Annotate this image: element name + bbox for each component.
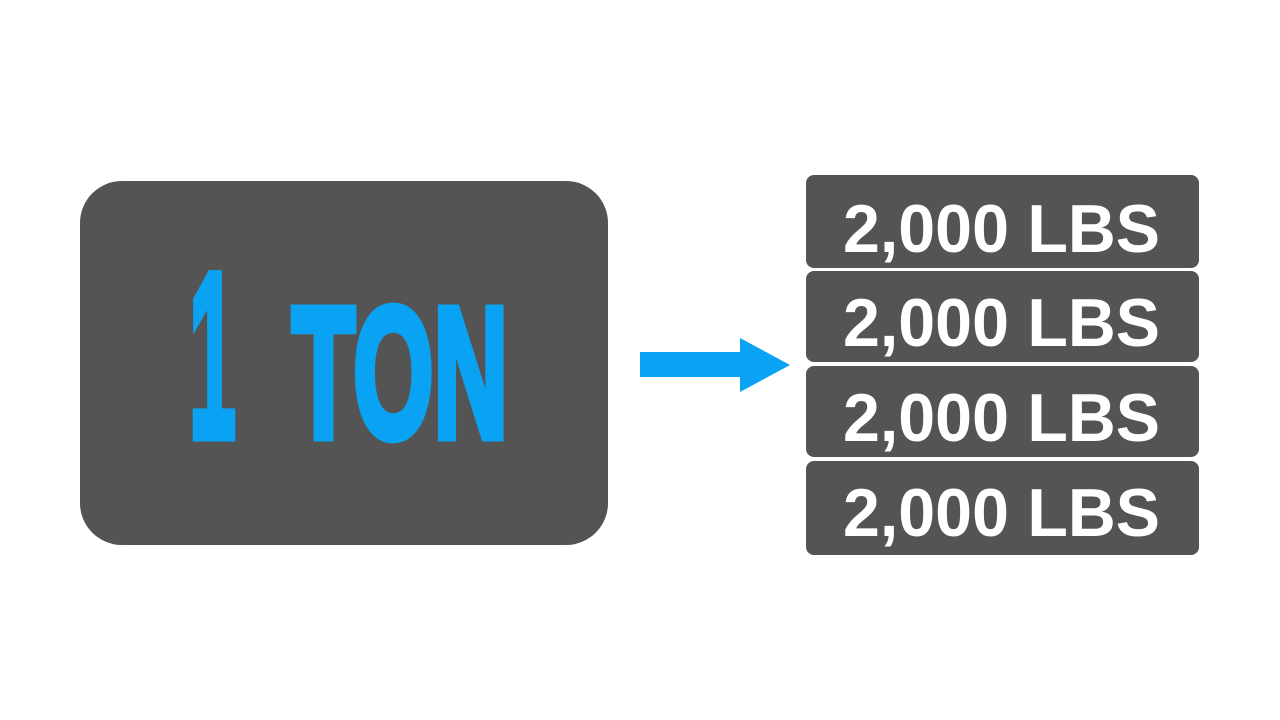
arrow xyxy=(640,338,790,392)
box 1: 2,000 LBS xyxy=(843,191,1160,267)
box 3: 2,000 LBS xyxy=(843,380,1160,456)
panel: 1 ton xyxy=(80,181,608,545)
text: TON: TON xyxy=(292,270,508,477)
box 3 xyxy=(806,366,1199,457)
panel: 1 ton: 1 xyxy=(189,224,236,488)
box 2 xyxy=(806,271,1199,362)
box 1 xyxy=(806,175,1199,268)
box 4 xyxy=(806,461,1199,555)
stacked boxes: 2,000 lbs x4 xyxy=(806,175,1199,555)
box 4: 2,000 LBS xyxy=(843,475,1160,551)
box 2: 2,000 LBS xyxy=(843,285,1160,361)
